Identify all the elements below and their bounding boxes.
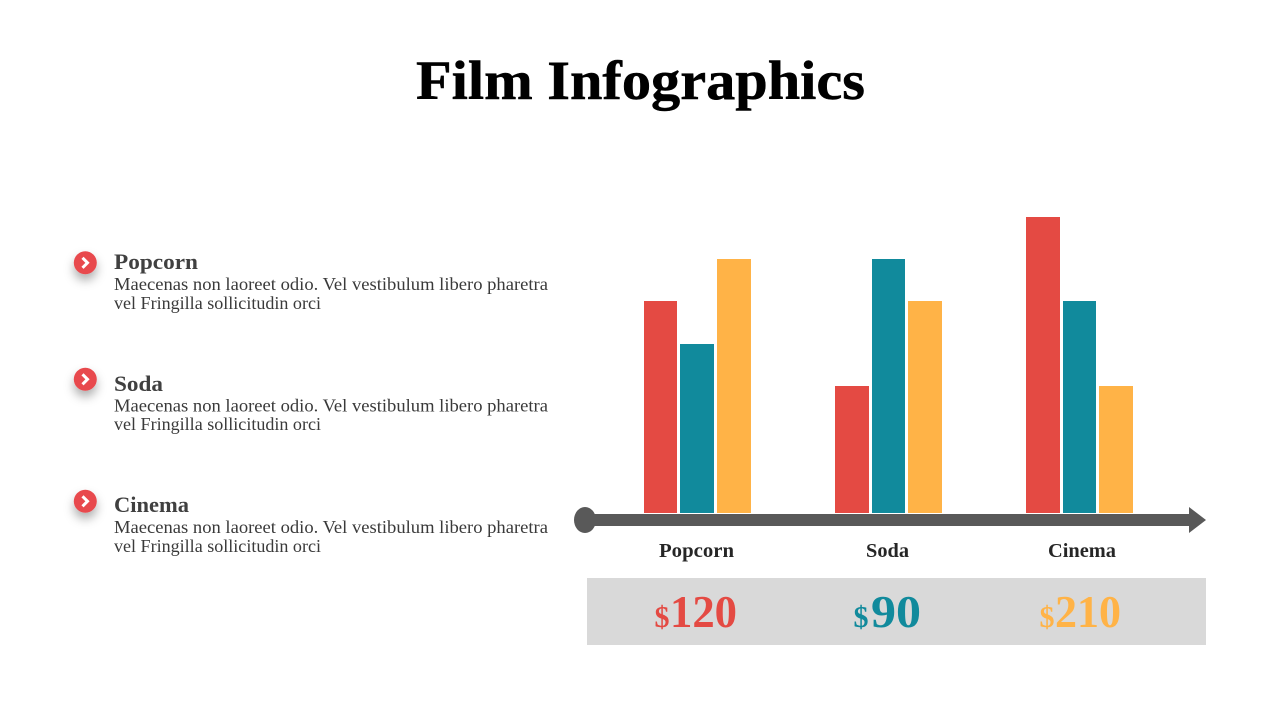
price: Soda: 90: [871, 587, 921, 637]
price: Cinema: $: [1040, 599, 1054, 634]
icon: soda chevron bullet: [74, 368, 97, 391]
list item: Popcorn: [74, 249, 548, 313]
bars: Popcorn group: [644, 259, 751, 513]
heading: Popcorn: Popcorn: [114, 249, 198, 274]
axis label: Soda: Soda: [866, 540, 909, 562]
icon: cinema chevron bullet: [74, 490, 97, 513]
list item: Soda: [74, 368, 548, 434]
text block: Soda description: vel Fringilla sollicitudin orci: [114, 414, 321, 434]
text block: Soda description: [114, 396, 548, 434]
icon: popcorn chevron bullet: [74, 251, 97, 274]
axis label: Popcorn: Popcorn: [659, 540, 734, 562]
bars: Cinema group: [1026, 217, 1133, 513]
title: Film Infographics: [416, 50, 865, 111]
text block: Cinema description: vel Fringilla sollicitudin orci: [114, 536, 321, 556]
text block: Cinema description: Maecenas non laoreet odio. Vel vestibulum libero pharetra: [114, 517, 548, 537]
heading: Soda: Soda: [114, 371, 163, 396]
bar chart: [574, 217, 1206, 562]
price: Cinema: 210: [1055, 587, 1121, 637]
panel: prices: [587, 578, 1206, 645]
bars: Soda group: [835, 259, 942, 513]
price: Popcorn: 120: [670, 587, 737, 637]
text block: Popcorn description: vel Fringilla sollicitudin orci: [114, 293, 321, 313]
price: Soda: [854, 587, 921, 637]
axis label: Cinema: Cinema: [1048, 540, 1116, 562]
price: Popcorn: $: [654, 599, 670, 634]
text block: Popcorn description: [114, 274, 548, 313]
heading: Cinema: Cinema: [114, 492, 189, 517]
text block: Soda description: Maecenas non laoreet odio. Vel vestibulum libero pharetra: [114, 396, 548, 416]
list item: Cinema: [74, 490, 548, 556]
price: Soda: $: [854, 599, 868, 634]
arrow: chart axis: [574, 507, 1206, 533]
text block: Popcorn description: Maecenas non laoreet odio. Vel vestibulum libero pharetra: [114, 274, 548, 294]
text block: Cinema description: [114, 517, 548, 556]
